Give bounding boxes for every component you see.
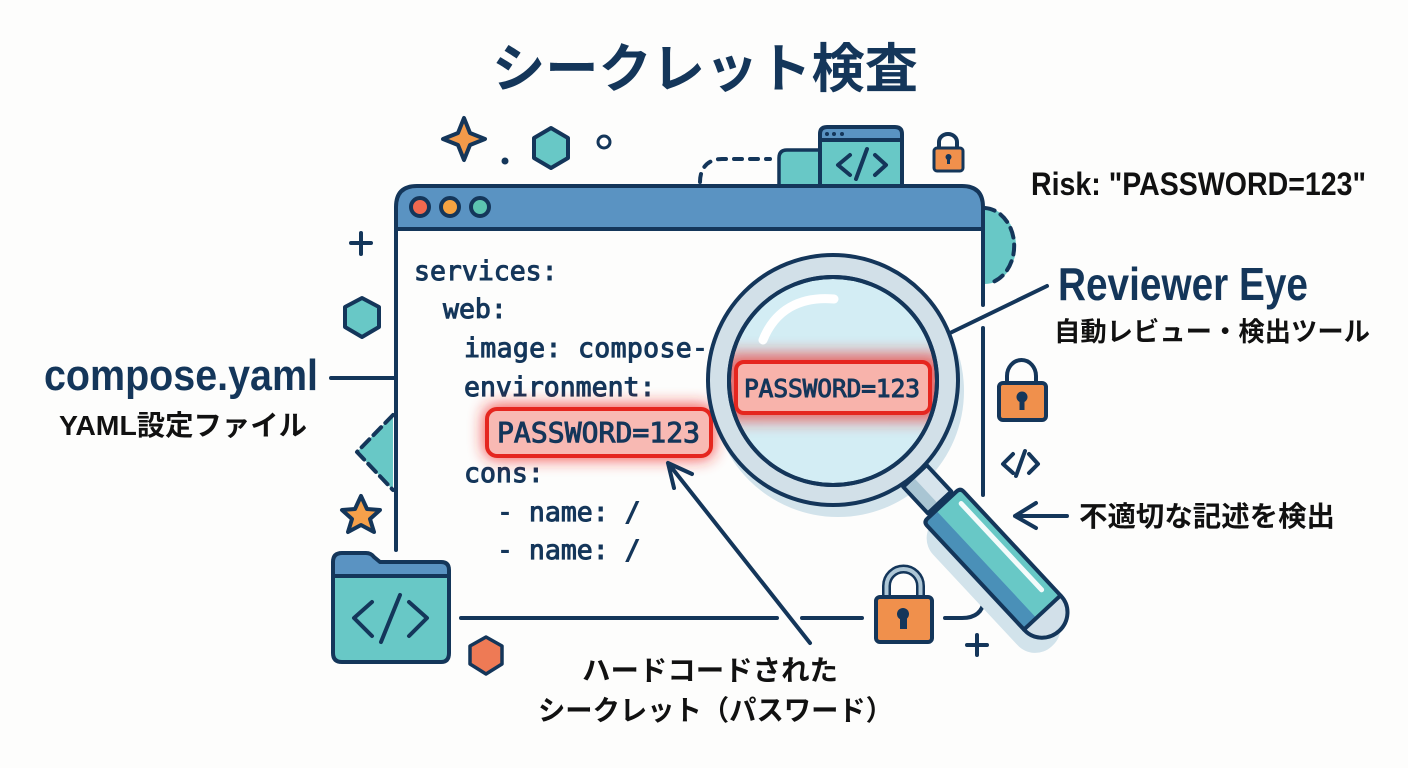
magnified secret: PASSWORD=123 (744, 374, 920, 403)
code text: image: compose- (464, 333, 708, 364)
label: detect improper: 不適切な記述を検出 (1079, 501, 1335, 532)
panel: code window (396, 186, 983, 618)
icon: magnifying glass (708, 255, 1078, 663)
arrow: to magnifier (1015, 503, 1067, 528)
icon: orange star (342, 496, 380, 532)
code text: cons: (464, 458, 544, 489)
icon: small code glyph (1003, 451, 1038, 476)
magnifier shadow (712, 265, 1071, 663)
code text: environment: (464, 372, 655, 403)
code text: web: (443, 294, 507, 325)
magnifier rim (708, 255, 958, 505)
icon: plus bottom right (967, 635, 987, 655)
label: automated review tool: 自動レビュー・検出ツール (1054, 317, 1370, 347)
label: reviewer eye: Reviewer Eye (1058, 258, 1308, 310)
window buttons (411, 198, 489, 216)
highlighted secret (484, 405, 714, 459)
icon: large right lock (999, 360, 1046, 420)
bottom line segments (802, 600, 984, 618)
icon: plus left (351, 233, 371, 254)
label: hardcoded secret (538, 655, 893, 726)
icon: left teal hexagon (345, 298, 379, 337)
magnifier neck (903, 465, 951, 513)
code text (414, 256, 708, 566)
icon: small ring (598, 136, 610, 148)
label: hardcoded secret: ハードコードされた (582, 655, 838, 686)
icon: small dot (502, 158, 508, 164)
magnifier lens (729, 277, 937, 485)
callout line: compose (331, 376, 395, 380)
highlighted secret: PASSWORD=123 (497, 416, 700, 449)
icon: code folder (333, 553, 449, 662)
label: YAML config file: YAML設定ファイル (59, 410, 307, 441)
teal dashed half circle (985, 208, 1016, 284)
title: シークレット検査 (492, 40, 918, 99)
icon: small code window (820, 127, 902, 186)
label: compose.yaml: compose.yaml (44, 351, 318, 400)
icon: bottom lock (876, 569, 932, 642)
code text: - name: / (497, 535, 641, 566)
arrow: to secret (668, 463, 810, 643)
icon: small folder tab (779, 150, 822, 186)
lens highlight (763, 299, 834, 340)
icon: top teal hexagon (534, 128, 568, 168)
icon: four-point star (443, 118, 485, 160)
label: risk: Risk: "PASSWORD=123" (1031, 166, 1366, 202)
teal dashed diamond (357, 415, 393, 490)
dashed connector (700, 159, 770, 182)
magnifier handle (924, 488, 1078, 648)
icon: orange hexagon (470, 637, 502, 674)
label: hardcoded secret: シークレット（パスワード） (538, 695, 893, 726)
code text: services: (414, 256, 558, 287)
window title bar (396, 186, 983, 229)
magnified secret (725, 354, 941, 420)
window frame (396, 186, 983, 618)
icon: small lock (934, 134, 963, 171)
code text: - name: / (497, 497, 641, 528)
callout line: reviewer (950, 286, 1047, 333)
